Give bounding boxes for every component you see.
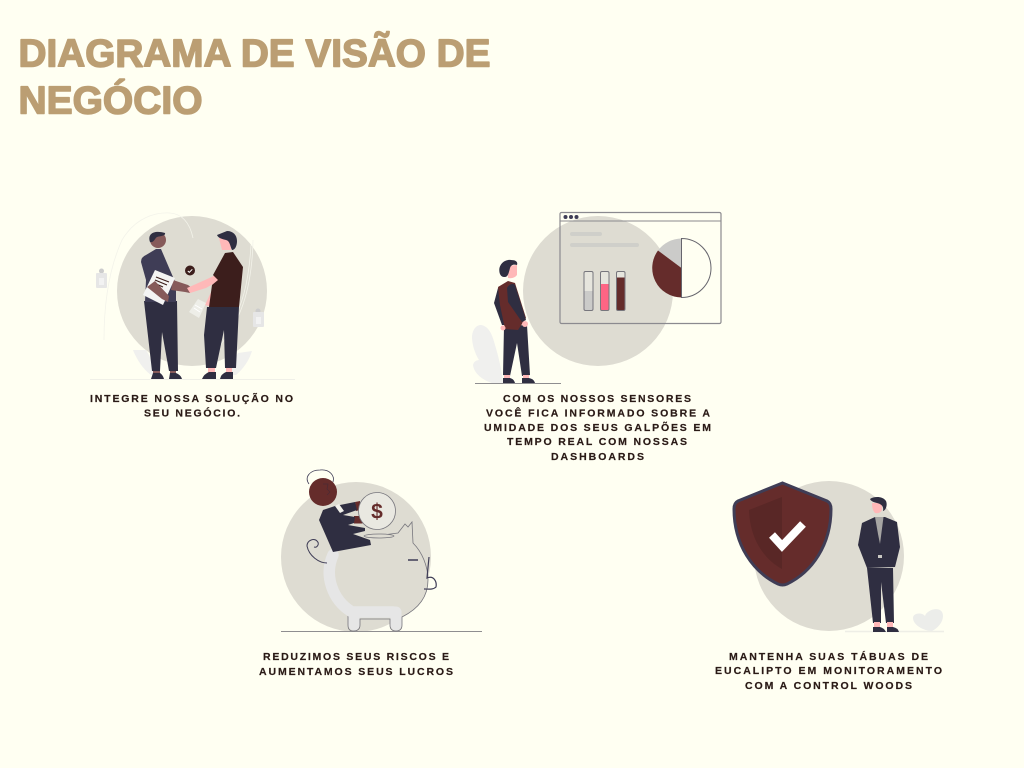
shield xyxy=(734,483,831,585)
background circle xyxy=(523,216,673,366)
bar chart xyxy=(584,272,625,310)
caption: sensors: COM OS NOSSOS SENSORES xyxy=(503,393,691,405)
person xyxy=(858,497,900,632)
coin xyxy=(358,492,396,530)
caption: integrate: SEU NEGÓCIO. xyxy=(144,406,240,420)
caption: savings: AUMENTAMOS SEUS LUCROS xyxy=(259,666,453,678)
caption: monitoring xyxy=(715,650,942,692)
title: DIAGRAMA DE VISÃO DE xyxy=(18,32,490,76)
background circle xyxy=(281,482,431,632)
panel: piggy bank xyxy=(281,470,482,632)
caption: savings xyxy=(259,651,453,678)
coin: $ xyxy=(371,500,383,524)
check badge xyxy=(185,266,195,276)
background circle xyxy=(754,481,904,631)
plant xyxy=(913,609,943,631)
caption: monitoring: EUCALIPTO EM MONITORAMENTO xyxy=(715,665,942,677)
decorative curves xyxy=(104,213,253,352)
caption: sensors: TEMPO REAL COM NOSSAS xyxy=(507,436,687,448)
ground line xyxy=(845,630,944,632)
right person xyxy=(187,231,243,379)
caption: sensors: DASHBOARDS xyxy=(551,451,644,463)
plant xyxy=(472,325,503,383)
pie chart xyxy=(652,238,711,298)
left person xyxy=(141,232,192,379)
ground line xyxy=(475,382,561,384)
caption: savings: REDUZIMOS SEUS RISCOS E xyxy=(263,651,449,663)
caption: monitoring: COM A CONTROL WOODS xyxy=(745,680,912,692)
browser window xyxy=(560,212,721,324)
person xyxy=(494,260,535,383)
panel: handshake integration xyxy=(90,213,295,380)
title: NEGÓCIO xyxy=(18,78,202,122)
caption: monitoring: MANTENHA SUAS TÁBUAS DE xyxy=(729,650,928,663)
ground line xyxy=(281,630,482,632)
tag icons xyxy=(96,268,264,327)
person xyxy=(307,470,371,552)
caption: integrate: INTEGRE NOSSA SOLUÇÃO NO xyxy=(90,392,293,405)
piggy bank xyxy=(307,522,436,631)
ground line xyxy=(90,378,295,380)
title xyxy=(18,32,490,122)
caption: sensors xyxy=(484,393,711,463)
panel: security shield xyxy=(734,481,944,632)
caption: sensors: UMIDADE DOS SEUS GALPÕES EM xyxy=(484,421,711,434)
background circle xyxy=(117,216,267,366)
caption: integrate xyxy=(90,392,293,420)
plants xyxy=(133,350,252,375)
caption: sensors: VOCÊ FICA INFORMADO SOBRE A xyxy=(486,406,710,420)
panel: sensors dashboard xyxy=(472,212,721,384)
